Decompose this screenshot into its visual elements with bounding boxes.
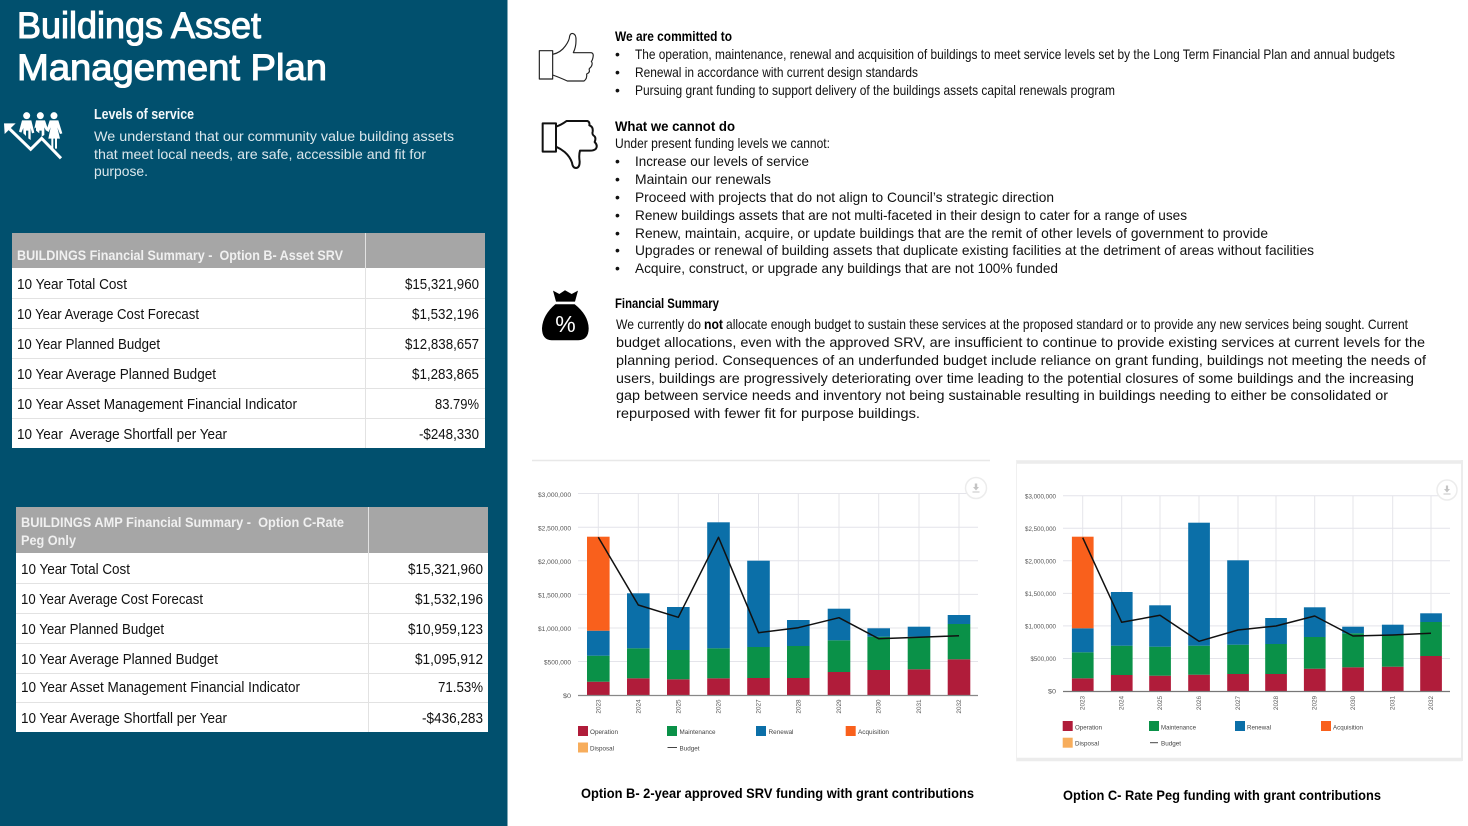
legend: Maintenance <box>1161 724 1196 732</box>
y-axis labels: $2,000,000 <box>538 559 571 566</box>
legend: Disposal <box>590 746 614 752</box>
x-axis years: 2024 <box>1119 695 1126 710</box>
text block: we are committed to <box>615 28 1395 98</box>
y-axis labels <box>538 492 572 700</box>
y-axis labels: $2,500,000 <box>1025 526 1056 533</box>
y-axis labels: $0 <box>1048 688 1057 696</box>
table: Option B financial summary: $15,321,960 <box>405 277 479 293</box>
legend: Budget <box>680 746 700 752</box>
y-axis labels <box>1025 494 1057 696</box>
text block: what we cannot do: Maintain our renewals <box>635 171 771 187</box>
text block: financial summary: users, buildings are progressively deteriorating over time leading to the potential closures of some buildings and the increasing <box>616 370 1414 386</box>
budget line <box>1083 538 1431 641</box>
budget line <box>598 537 959 639</box>
y-axis labels: $3,000,000 <box>538 492 571 499</box>
caption: Option B: Option B- 2-year approved SRV funding with grant contributions <box>581 785 974 801</box>
caption: Option C: Option C- Rate Peg funding with grant contributions <box>1063 787 1381 803</box>
table: Option B financial summary: 10 Year Average Planned Budget <box>17 367 216 383</box>
table: Option B financial summary <box>12 233 485 448</box>
y-axis labels: $1,000,000 <box>538 626 571 633</box>
table: Option C financial summary: 10 Year Asset Management Financial Indicator <box>21 680 300 696</box>
table: Option B financial summary: 10 Year Asset Management Financial Indicator <box>17 397 297 413</box>
text block: what we cannot do: Proceed with projects that do not align to Council’s strategic direction <box>635 189 1054 205</box>
table: Option B financial summary: BUILDINGS Financial Summary - Option B- Asset SRV <box>17 247 344 263</box>
text block: we are committed to: Renewal in accordance with current design standards <box>635 64 918 80</box>
text block: financial summary: planning period. Consequences of an underfunded budget include reliance on grant funding, buildings not meeting the needs of <box>616 352 1426 368</box>
table: Option B financial summary: -$248,330 <box>419 427 479 443</box>
y-axis labels: $1,500,000 <box>1025 591 1056 598</box>
y-axis labels: $500,000 <box>544 660 571 666</box>
text block: financial summary: We currently do <box>616 316 701 332</box>
table: Option C financial summary: $10,959,123 <box>408 622 483 638</box>
text block: what we cannot do: • <box>615 207 620 223</box>
legend <box>578 726 889 752</box>
x-axis years: 2028 <box>795 699 802 714</box>
stacked bars <box>587 522 970 695</box>
text block: what we cannot do: • <box>615 242 620 258</box>
text block: financial summary: not <box>704 316 723 332</box>
x-axis years: 2025 <box>1157 695 1164 710</box>
table: Option B financial summary: $1,283,865 <box>412 367 479 383</box>
table: Option C financial summary: 10 Year Average Cost Forecast <box>21 592 203 608</box>
legend: Operation <box>590 729 618 736</box>
x-axis years: 2029 <box>836 699 843 714</box>
text block: financial summary: Financial Summary <box>615 295 719 311</box>
x-axis years: 2023 <box>1080 695 1087 710</box>
y-axis labels: $1,500,000 <box>538 592 571 600</box>
text block: what we cannot do: What we cannot do <box>615 118 735 134</box>
table: Option C financial summary: 10 Year Planned Budget <box>21 622 164 638</box>
text block: financial summary: budget allocations, even with the approved SRV, are insufficient to continue to provide existing services at current levels for the <box>616 334 1425 350</box>
legend: Operation <box>1075 724 1102 732</box>
table: Option C financial summary: $1,095,912 <box>415 652 483 668</box>
text block: what we cannot do: • <box>615 225 620 241</box>
legend: Budget <box>1161 740 1181 748</box>
x-axis years: 2032 <box>1428 695 1435 710</box>
icon: thumbs up <box>539 33 593 81</box>
x-axis years: 2027 <box>756 699 762 714</box>
legend: Renewal <box>768 729 794 736</box>
icon: download button <box>966 478 986 498</box>
y-axis labels: $3,000,000 <box>1025 494 1056 500</box>
legend: Acquisition <box>858 729 889 736</box>
x-axis years: 2026 <box>1196 695 1203 710</box>
table: Option B financial summary: 83.79% <box>435 397 479 413</box>
x-axis years: 2026 <box>716 699 722 714</box>
title: Management Plan <box>17 47 327 88</box>
x-axis years: 2030 <box>1350 695 1357 710</box>
legend <box>1063 721 1363 748</box>
table: Option C financial summary: 71.53% <box>438 680 483 696</box>
table: Option C financial summary: 10 Year Average Shortfall per Year <box>21 711 227 727</box>
stacked bars <box>1072 523 1442 691</box>
x-axis years: 2031 <box>1390 695 1397 710</box>
x-axis years: 2027 <box>1235 695 1242 710</box>
text block: what we cannot do: Renew, maintain, acquire, or update buildings that are the remit of other levels of government to provide <box>635 225 1268 241</box>
table: Option C financial summary: $1,532,196 <box>415 592 483 608</box>
text block: what we cannot do: Acquire, construct, or upgrade any buildings that are not 100% funded <box>635 260 1058 276</box>
levels of service text block <box>94 107 454 179</box>
table: Option B financial summary: $12,838,657 <box>405 337 479 353</box>
levels of service text block: that meet local needs, are safe, accessible and fit for <box>94 146 426 162</box>
text block: we are committed to: • <box>615 82 620 98</box>
text block: what we cannot do: • <box>615 171 620 187</box>
table: Option C financial summary: Peg Only <box>21 532 76 548</box>
text block: we are committed to: • <box>615 46 620 62</box>
title <box>17 5 327 88</box>
text block: what we cannot do: Under present funding levels we cannot: <box>615 135 830 151</box>
table: Option B financial summary: 10 Year Average Cost Forecast <box>17 307 199 323</box>
text block: what we cannot do: • <box>615 153 620 169</box>
text block: what we cannot do <box>615 118 1314 276</box>
x-axis years: 2028 <box>1273 695 1280 710</box>
y-axis labels: $0 <box>563 693 572 700</box>
chart: Option C stacked bars <box>1016 460 1462 761</box>
table: Option C financial summary: 10 Year Total Cost <box>21 562 130 578</box>
legend: Renewal <box>1247 724 1271 732</box>
x-axis years: 2025 <box>675 699 682 714</box>
legend: Acquisition <box>1333 724 1363 732</box>
y-axis labels: $2,000,000 <box>1025 558 1056 566</box>
panel: left teal sidebar <box>0 0 508 826</box>
x-axis years: 2023 <box>595 699 602 714</box>
x-axis years: 2032 <box>956 699 963 714</box>
icon: download button <box>1437 480 1457 500</box>
text block: financial summary: gap between service needs and inventory not being sustainable resulting in buildings needing to either be consolidated or <box>616 387 1388 403</box>
text block: financial summary: repurposed with fewer fit for purpose buildings. <box>616 405 920 421</box>
text block: what we cannot do: Upgrades or renewal of building assets that duplicate existing facilities at the detriment of areas without facilities <box>635 242 1314 258</box>
y-axis labels: $2,500,000 <box>538 526 571 532</box>
x-axis years <box>595 699 963 714</box>
table: Option B financial summary: 10 Year Planned Budget <box>17 337 160 353</box>
table: Option B financial summary: 10 Year Average Shortfall per Year <box>17 427 227 443</box>
y-axis labels: $1,000,000 <box>1025 624 1056 630</box>
x-axis years: 2031 <box>916 699 923 714</box>
icon: money bag with percent <box>542 290 589 340</box>
levels of service text block: We understand that our community value building assets <box>94 128 454 144</box>
title: Buildings Asset <box>17 5 262 46</box>
icon: thumbs down <box>543 121 597 168</box>
levels of service text block: Levels of service <box>94 107 194 123</box>
icon: people with rising-falling arrow <box>4 112 62 158</box>
table: Option C financial summary <box>16 507 488 732</box>
table: Option C financial summary: BUILDINGS AMP Financial Summary - Option C-Rate <box>21 514 344 530</box>
table: Option C financial summary: 10 Year Average Planned Budget <box>21 652 218 668</box>
text block: financial summary <box>615 295 1426 421</box>
text block: what we cannot do: • <box>615 189 620 205</box>
x-axis years <box>1080 695 1435 710</box>
table: Option B financial summary: $1,532,196 <box>412 307 479 323</box>
levels of service text block: purpose. <box>94 163 148 179</box>
icon: money bag with percent: % <box>555 311 576 337</box>
x-axis years: 2024 <box>635 699 642 714</box>
legend: Maintenance <box>680 729 716 736</box>
x-axis years: 2030 <box>876 699 883 714</box>
y-axis labels: $500,000 <box>1030 656 1056 663</box>
chart: Option B stacked bars <box>532 460 990 752</box>
text block: we are committed to: Pursuing grant funding to support delivery of the buildings assets capital renewals program <box>635 82 1115 98</box>
text block: we are committed to: We are committed to <box>615 28 732 44</box>
text block: we are committed to: • <box>615 64 620 80</box>
text block: what we cannot do: Renew buildings assets that are not multi-faceted in their design to cater for a range of uses <box>635 207 1187 223</box>
table: Option C financial summary: -$436,283 <box>422 711 483 727</box>
legend: Disposal <box>1075 740 1099 748</box>
text block: what we cannot do: Increase our levels of service <box>635 153 809 169</box>
table: Option B financial summary: 10 Year Total Cost <box>17 277 127 293</box>
text block: what we cannot do: • <box>615 260 620 276</box>
x-axis years: 2029 <box>1312 695 1319 710</box>
table: Option C financial summary: $15,321,960 <box>408 562 483 578</box>
